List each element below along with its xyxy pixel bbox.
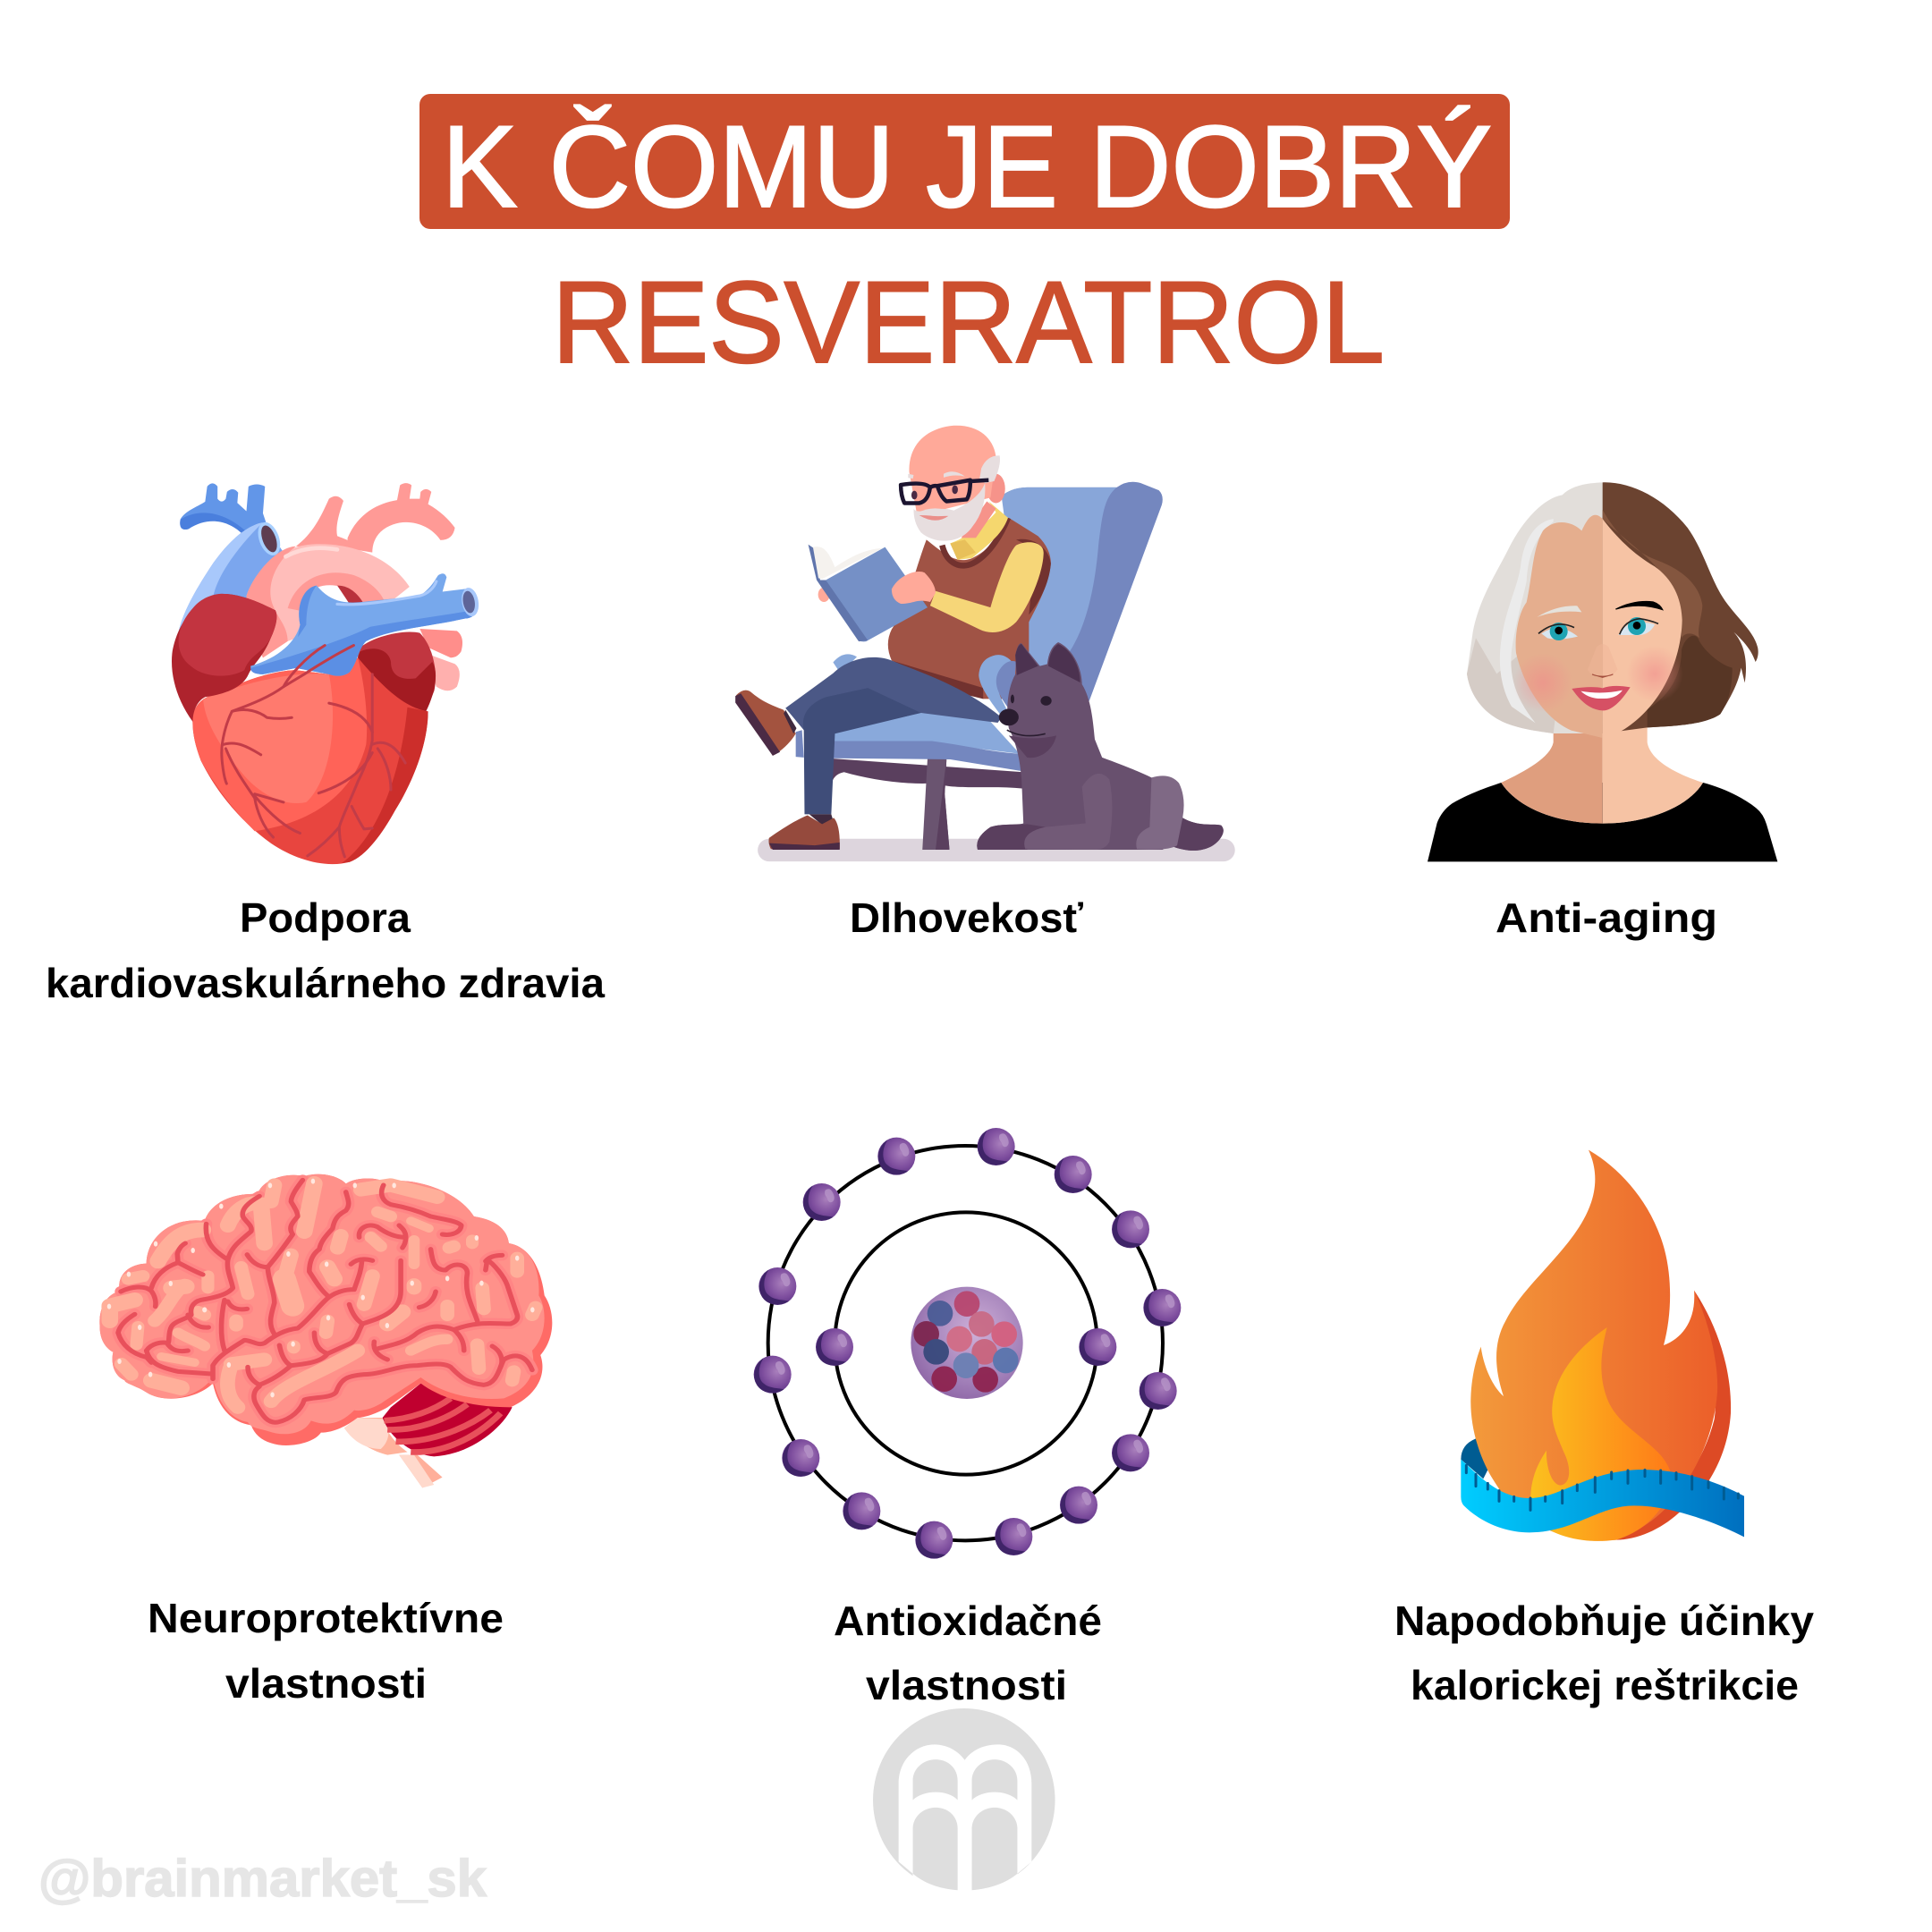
- watermark handle: @brainmarket_sk: [38, 1850, 487, 1908]
- label: longevity: Dlhovekosť: [850, 894, 1084, 941]
- icon: heart: [172, 483, 481, 864]
- title banner: [419, 94, 1510, 232]
- label: heart: Podpora: [240, 894, 411, 941]
- label: neuroprotective: Neuroprotektívne: [148, 1595, 504, 1641]
- label: antioxidant: vlastnosti: [866, 1662, 1067, 1708]
- icon: brain: [99, 1174, 552, 1487]
- label: heart: [46, 894, 605, 1006]
- title line 2: RESVERATROL: [552, 257, 1385, 387]
- logo: [873, 1708, 1055, 1898]
- label: neuroprotective: vlastnosti: [225, 1660, 427, 1707]
- label: anti-aging: Anti-aging: [1496, 894, 1717, 941]
- label: calorie restriction: [1394, 1597, 1814, 1708]
- label: antioxidant: [834, 1597, 1102, 1708]
- icon: atom: [754, 1128, 1181, 1559]
- label: calorie restriction: Napodobňuje účinky: [1394, 1597, 1814, 1644]
- icon: flame with measuring tape: [1461, 1150, 1744, 1541]
- label: antioxidant: Antioxidačné: [834, 1597, 1102, 1644]
- nucleus: [911, 1287, 1023, 1399]
- icon: old man reading with dog: [735, 426, 1235, 861]
- icon: half old half young face: [1428, 482, 1777, 861]
- title line 1: K ČOMU JE DOBRÝ: [442, 101, 1492, 232]
- label: neuroprotective: [148, 1595, 504, 1707]
- electrons: [754, 1128, 1181, 1559]
- label: calorie restriction: kalorickej reštrikcie: [1411, 1662, 1799, 1708]
- label: heart: kardiovaskulárneho zdravia: [46, 960, 605, 1006]
